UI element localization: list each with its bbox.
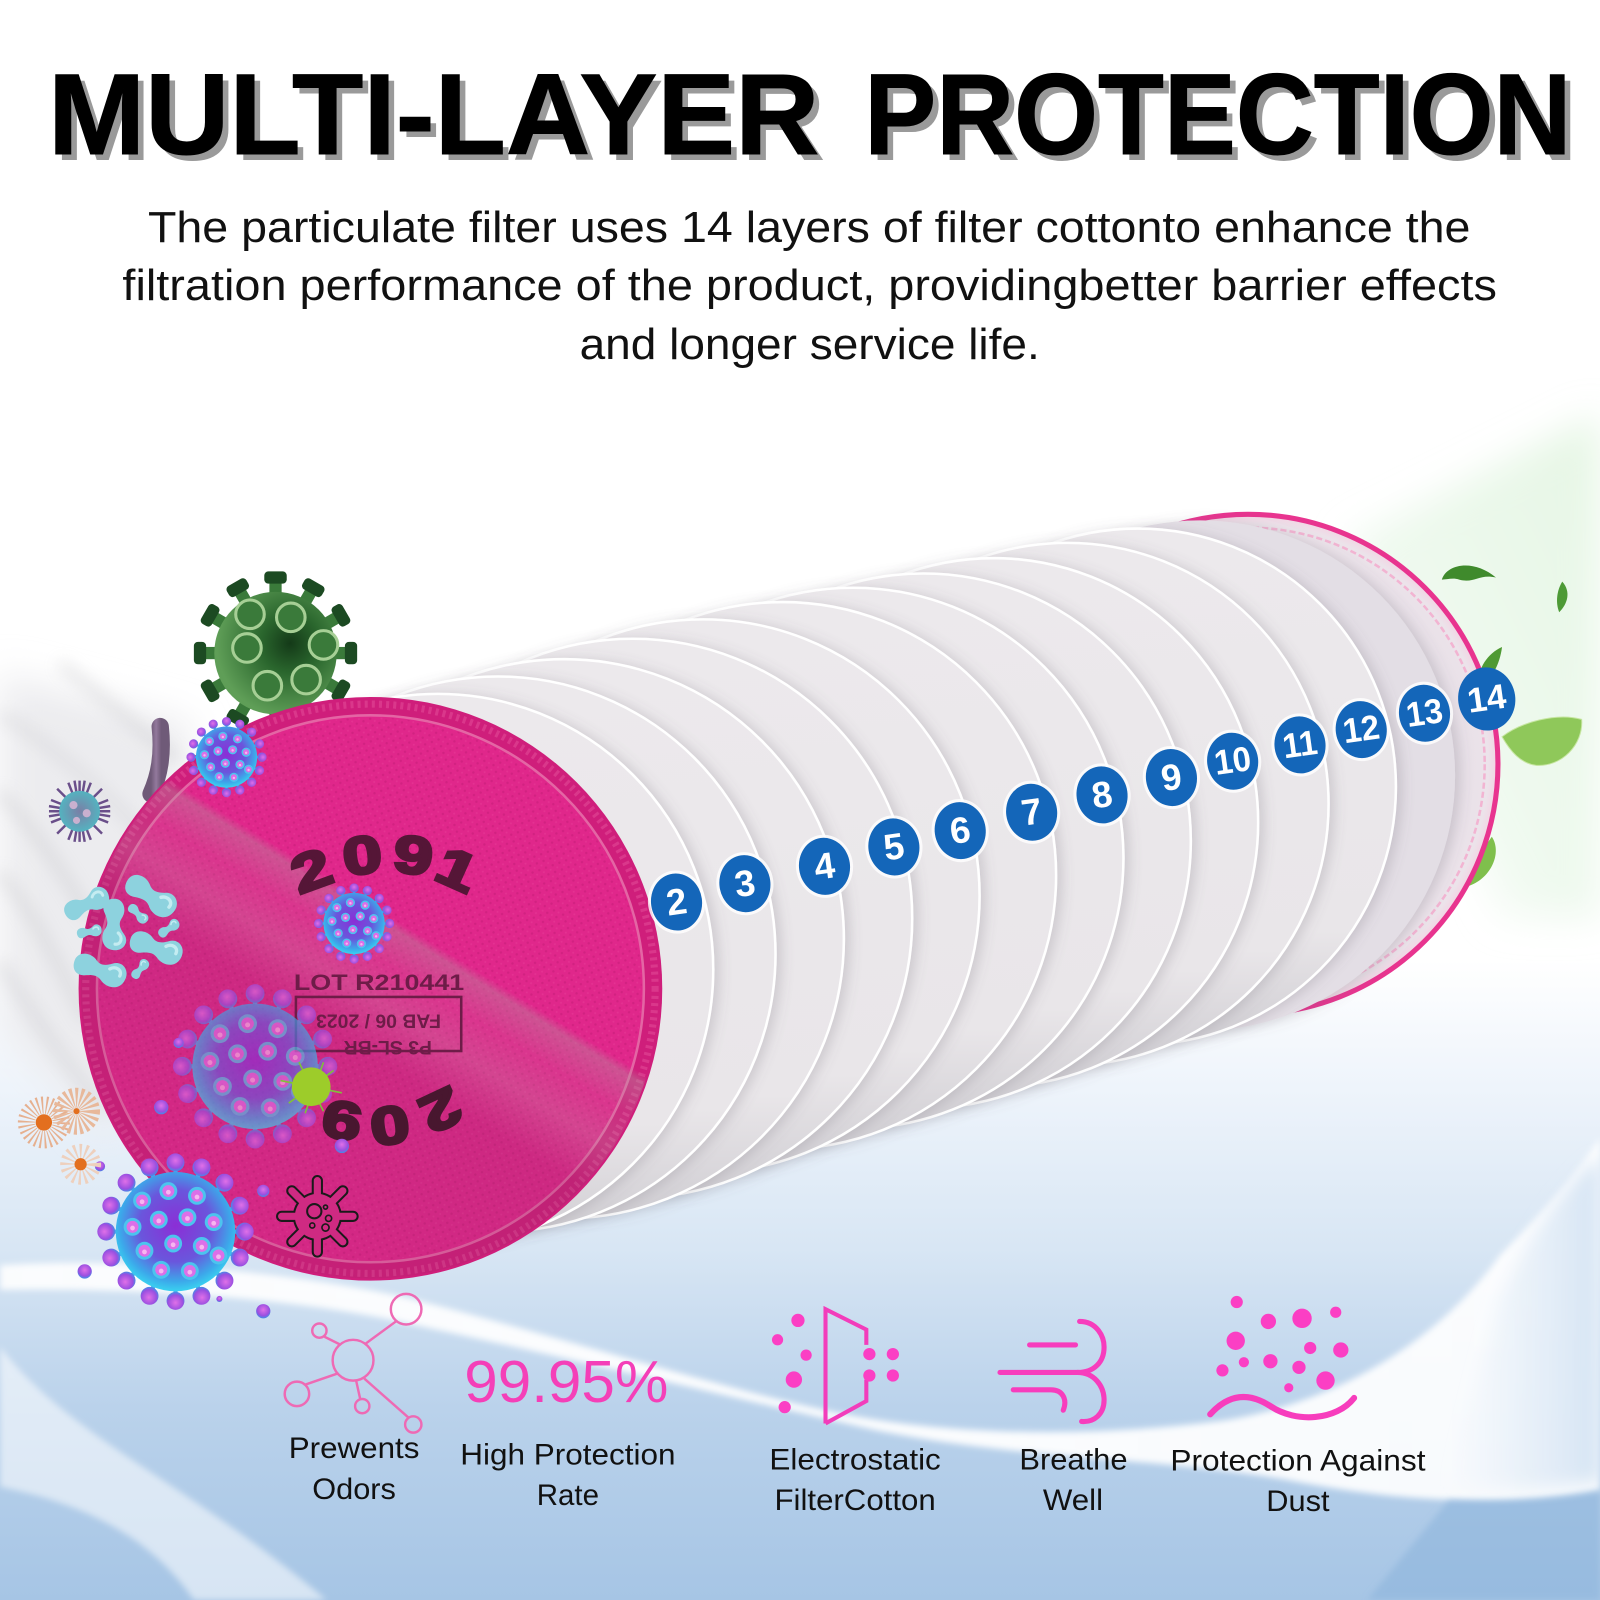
- label: Well: [1043, 1484, 1103, 1517]
- orange pollen spores: [27, 1098, 94, 1178]
- layer 2: [162, 694, 713, 1245]
- label: Protection Against: [1170, 1444, 1426, 1477]
- leaf: dark top: [1442, 565, 1496, 581]
- title: [48, 51, 1578, 185]
- translucent air band: [81, 699, 660, 1279]
- large translucent virus: [173, 984, 337, 1149]
- layer 10: [730, 558, 1258, 1087]
- badge 13: 13: [1404, 692, 1445, 735]
- badge 10: [1200, 726, 1265, 797]
- green coronavirus: [194, 571, 357, 735]
- small virus: upper disc edge: [186, 717, 267, 797]
- printed 2091 top: 1: [427, 835, 487, 905]
- front pink filter disc: [79, 697, 662, 1281]
- weave texture: [99, 717, 642, 1260]
- disc face: [97, 715, 644, 1262]
- layer 5: [353, 639, 912, 1198]
- leaf behind filter stack: [1469, 837, 1496, 886]
- label: [1170, 1444, 1426, 1518]
- badge 7: 7: [1019, 790, 1045, 834]
- badge 8: 8: [1089, 773, 1115, 816]
- leaf: narrow: [1557, 582, 1567, 612]
- badge 9: [1139, 742, 1204, 813]
- printed 2091 bottom, inverted: [318, 1074, 471, 1157]
- printed date box: P3 SL-BR: [344, 1036, 432, 1058]
- background: lower-left white wedge: [0, 1347, 327, 1600]
- badge 11: [1267, 710, 1333, 780]
- printed 2091 bottom, inverted: 0: [366, 1093, 413, 1157]
- feature: electrostatic filter cotton: [769, 1309, 941, 1517]
- printed 2091 top: 2: [283, 837, 340, 906]
- label: Dust: [1266, 1485, 1330, 1518]
- layer 6: [427, 619, 980, 1172]
- stray virus particles: [78, 1038, 349, 1318]
- badge 13: [1392, 678, 1457, 749]
- small virus: over 2091 print: [314, 883, 394, 964]
- label: [289, 1432, 419, 1506]
- layer 13: gauze inner disc: [945, 520, 1455, 1031]
- badge 14: 14: [1465, 678, 1509, 721]
- badge 4: 4: [811, 844, 838, 888]
- badge 3: 3: [732, 862, 758, 905]
- layer 14: pink-rimmed gauze disc: [998, 514, 1498, 1014]
- printed date box: FAB 06 / 2023: [316, 1009, 441, 1031]
- large virus: lower left: [97, 1153, 254, 1310]
- label: FilterCotton: [774, 1484, 936, 1517]
- icon: dust particles: [1210, 1296, 1354, 1417]
- yellow-green germ: [281, 1062, 342, 1113]
- badge 6: [928, 795, 993, 866]
- badge 7: [999, 777, 1064, 848]
- label: Rate: [537, 1479, 599, 1512]
- badge 6: 6: [947, 809, 973, 852]
- label: [1019, 1443, 1128, 1517]
- description text: [122, 203, 1497, 369]
- printed 2091 top: 0: [339, 824, 385, 888]
- number badges: [644, 664, 1519, 937]
- title: MULTI-LAYER: [48, 51, 819, 179]
- badge 14: [1454, 664, 1519, 734]
- layer 7: [509, 602, 1056, 1149]
- feature: breathe well: [1000, 1321, 1128, 1517]
- label: High Protection: [460, 1438, 676, 1471]
- filter stack: [162, 514, 1498, 1245]
- background: left air streaks: [0, 663, 194, 1143]
- badge 4: [792, 831, 857, 902]
- background: ribbon right-side fade: [1449, 1158, 1600, 1488]
- rim stitching: [86, 704, 655, 1273]
- badge 12: [1329, 694, 1394, 765]
- printed 2091 top: 9: [390, 824, 436, 888]
- title: MULTI-LAYER: [54, 57, 826, 185]
- badge 12: 12: [1340, 708, 1382, 751]
- badge 3: [712, 848, 778, 919]
- label: Breathe: [1019, 1443, 1128, 1476]
- icon: air flow: [1000, 1321, 1104, 1422]
- leaf: large light: [1502, 717, 1582, 765]
- printed date box: [296, 997, 461, 1058]
- badge 10: 10: [1212, 740, 1254, 783]
- label: Electrostatic: [769, 1443, 941, 1476]
- badge 5: 5: [881, 825, 907, 868]
- background: white ribbon wave: [0, 1138, 1600, 1500]
- description text: filtration performance of the product, providingbetter barrier effects: [122, 261, 1497, 310]
- printed lot number: LOT R210441: [294, 970, 464, 995]
- layer 3: [220, 677, 776, 1232]
- background: lower-right dark wedge: [1367, 1492, 1600, 1600]
- leaf behind filter stack top: [1478, 647, 1502, 686]
- description text: and longer service life.: [580, 320, 1040, 369]
- badge 2: 2: [664, 880, 689, 924]
- badge 5: [861, 812, 927, 882]
- label: Prewents: [289, 1432, 419, 1465]
- badge 9: 9: [1158, 756, 1184, 799]
- badge 2: [644, 867, 709, 937]
- badge 11: 11: [1280, 724, 1320, 766]
- stat: 99.95%: 99.95%: [464, 1348, 668, 1415]
- printed 2091 bottom, inverted: 9: [318, 1087, 366, 1152]
- layer 12: [880, 529, 1396, 1045]
- background: right green haze: [1347, 413, 1600, 918]
- black line-art virus: [282, 1181, 353, 1252]
- layer 11: [806, 543, 1329, 1065]
- feature: prevents odors: [285, 1294, 421, 1506]
- teal bacteria cluster: [60, 869, 186, 991]
- layer 4: [285, 659, 844, 1218]
- disc rim: [79, 697, 662, 1281]
- label: [769, 1443, 941, 1517]
- icon: molecule: [285, 1294, 421, 1433]
- printed 2091 top: [283, 824, 487, 906]
- label: [460, 1438, 676, 1512]
- description text: The particulate filter uses 14 layers of filter cottonto enhance the: [148, 203, 1470, 252]
- badge 8: [1069, 760, 1135, 830]
- icon: filter with particles: [772, 1309, 899, 1423]
- layer 9: [656, 573, 1191, 1108]
- feature: protection against dust: [1170, 1296, 1426, 1518]
- spiky grey-teal virus: [49, 781, 110, 842]
- layer 8: [583, 588, 1123, 1129]
- label: Odors: [312, 1473, 396, 1506]
- feature: high protection rate: [460, 1348, 676, 1512]
- title: PROTECTION: [864, 51, 1571, 179]
- purple rod bacterium: [151, 727, 161, 794]
- printed 2091 bottom, inverted: 2: [410, 1074, 471, 1144]
